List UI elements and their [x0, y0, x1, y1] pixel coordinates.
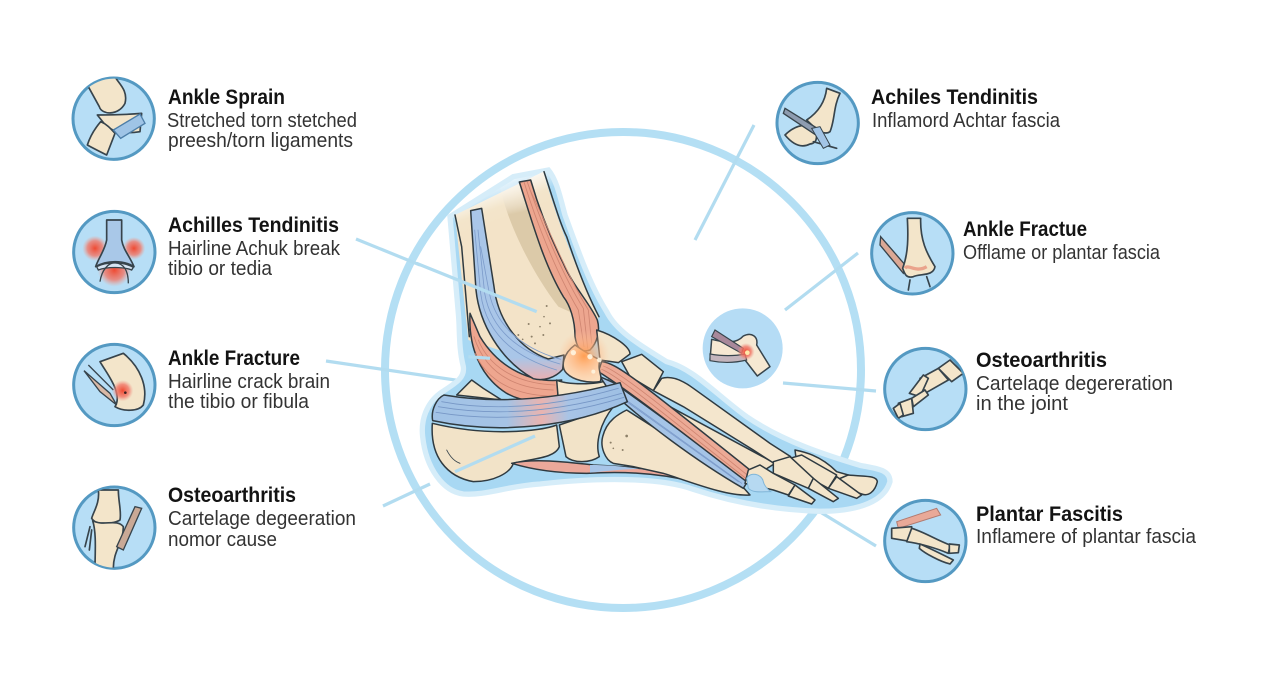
- icon: ankle sprain: [73, 77, 154, 159]
- diagonal tendon blue part: [600, 377, 748, 488]
- inset joint: [710, 330, 770, 376]
- first cuneiform: [597, 330, 630, 363]
- heading: Osteoarthritis: [168, 483, 296, 507]
- icon: tendinitis: [74, 211, 155, 293]
- condition: Osteoarthritis left: [74, 483, 356, 568]
- description: Hairline Achuk break: [168, 238, 341, 260]
- midfoot talus lower block: [559, 407, 613, 462]
- description: Offlame or plantar fascia: [963, 242, 1161, 264]
- bursa highlight: [747, 474, 771, 492]
- description: Stretched torn stetched: [167, 110, 357, 132]
- small hindfoot bone: [457, 380, 502, 400]
- icon: bone fracture: [872, 213, 953, 294]
- heading: Ankle Sprain: [168, 85, 285, 109]
- calcaneus heel bone: [432, 423, 559, 482]
- inflammation glow: [558, 330, 610, 382]
- icon: plantar fascia: [885, 500, 966, 582]
- large background circle: [385, 132, 861, 608]
- condition: Achilles Tendinitis left: [74, 211, 341, 293]
- icon: osteoarthritis: [74, 487, 155, 568]
- heading: Achiles Tendinitis: [871, 85, 1038, 109]
- navicular and long bone: [602, 410, 750, 495]
- blue ligament behind tibia: [471, 208, 564, 380]
- condition: Achiles Tendinitis right: [777, 82, 1061, 164]
- second cuneiform: [622, 354, 663, 391]
- tibia shadow band: [500, 183, 573, 313]
- heading: Ankle Fractue: [963, 217, 1087, 241]
- leg and tibia: [455, 172, 598, 367]
- description: Inflamord Achtar fascia: [872, 110, 1061, 132]
- diagonal tendon red part: [598, 362, 753, 482]
- description: Hairline crack brain: [168, 371, 330, 393]
- description: Inflamere of plantar fascia: [976, 526, 1197, 548]
- plantar ligament: [512, 461, 700, 482]
- heading: Plantar Fascitis: [976, 502, 1123, 526]
- description: Cartelaqe degereration: [976, 373, 1173, 395]
- condition: Ankle Sprain: preesh/torn ligaments: [168, 130, 353, 152]
- icon: fracture: [74, 344, 155, 426]
- metatarsal upper: [653, 377, 791, 464]
- condition: Osteoarthritis left: nomor cause: [168, 529, 277, 551]
- foot halo outline: [422, 170, 890, 511]
- condition: Ankle Fracture left: the tibio or fibula: [168, 391, 310, 413]
- callout line upper left start: [356, 239, 420, 265]
- talus bone: [557, 380, 620, 420]
- bone speckles: [517, 305, 551, 344]
- heading: Achilles Tendinitis: [168, 213, 339, 237]
- condition: Ankle Fracture left: [74, 344, 330, 426]
- inset detail circle: [703, 308, 783, 388]
- lower red tendon sweep: [470, 313, 562, 401]
- description: Cartelage degeeration: [168, 508, 356, 530]
- metatarsal lower: [670, 407, 775, 475]
- talus joint with inflammation: [563, 345, 601, 382]
- condition: Osteoarthritis right: in the joint: [976, 393, 1068, 415]
- condition: Ankle Fractue right: [872, 213, 1161, 294]
- toe bones: [745, 450, 877, 504]
- icon: achilles: [777, 82, 858, 164]
- condition: Osteoarthritis right: [885, 348, 1173, 430]
- condition: Achilles Tendinitis left: tibio or tedia: [168, 258, 273, 280]
- callout line ends over foot: [417, 263, 537, 472]
- heading: Ankle Fracture: [168, 346, 300, 370]
- condition: Plantar Fascitis: [885, 500, 1197, 582]
- central foot and ankle anatomy illustration: [417, 170, 890, 511]
- heading: Osteoarthritis: [976, 348, 1107, 372]
- large blue strap ligament: [432, 383, 627, 428]
- callout lines: [326, 125, 876, 546]
- red Achilles tendon: [519, 180, 599, 351]
- icon: toe bones: [885, 348, 966, 430]
- condition: Ankle Sprain: [73, 77, 357, 159]
